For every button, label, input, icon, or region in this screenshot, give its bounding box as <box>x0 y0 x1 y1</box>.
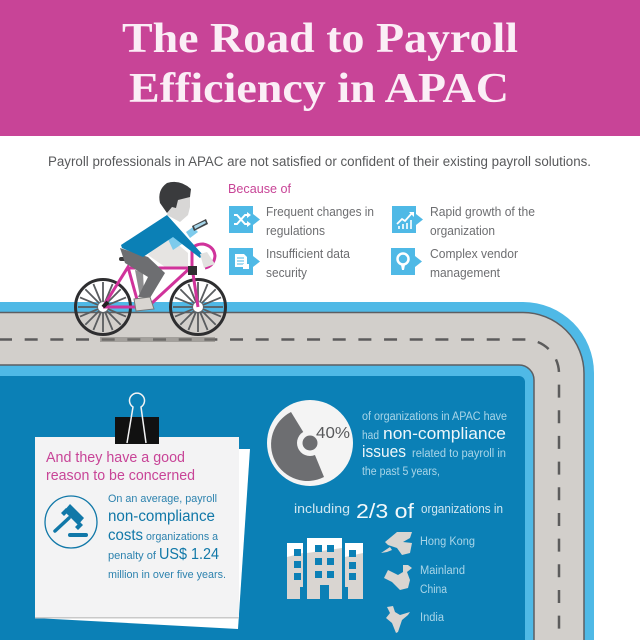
icon: office buildings <box>287 538 363 599</box>
map: China: Mainland <box>420 565 465 577</box>
map: India <box>386 606 445 633</box>
note: paper: reason to be concerned <box>46 467 195 484</box>
statistic text: of organizations in APAC have <box>362 411 507 423</box>
pie chart: 40% <box>267 400 353 486</box>
shoe <box>134 297 154 311</box>
map: Hong Kong <box>381 532 475 555</box>
statistic text: the past 5 years, <box>362 466 440 478</box>
reason: complex vendor management <box>391 247 518 280</box>
note text: penalty of <box>108 550 157 562</box>
including 2/3 of organizations: 2/3 of <box>356 501 415 523</box>
cuff on raised arm <box>186 227 198 238</box>
map: Hong Kong: Hong Kong <box>420 536 475 548</box>
near leg <box>120 248 165 298</box>
note: paper <box>35 393 250 629</box>
note text <box>108 493 226 581</box>
front wheel <box>170 280 226 334</box>
including 2/3 of organizations <box>294 501 503 523</box>
bike frame <box>103 244 215 307</box>
far leg <box>135 270 144 297</box>
reason: rapid growth: organization <box>430 224 495 238</box>
reason: insufficient data security: security <box>266 266 308 280</box>
reason: insufficient data security <box>229 247 350 280</box>
map: China: China <box>420 584 448 596</box>
note text: organizations a <box>146 531 219 543</box>
statistic text: non-compliance <box>383 424 506 443</box>
note heading: And they have a good <box>46 449 185 466</box>
statistic text: issues <box>362 442 406 461</box>
front sheet <box>35 437 239 618</box>
note text: non-compliance <box>108 508 215 525</box>
binder clip <box>115 393 159 444</box>
heading: because of: Because of <box>228 181 291 196</box>
title banner <box>0 0 640 136</box>
phone <box>192 219 208 231</box>
face <box>167 194 190 222</box>
reason: frequent changes <box>229 205 374 238</box>
including 2/3 of organizations: including <box>294 501 350 516</box>
statistic text <box>362 411 507 478</box>
reason: frequent changes: regulations <box>266 224 325 238</box>
map: China <box>384 565 465 596</box>
reason: insufficient data security: Insufficient data <box>266 247 350 261</box>
shirt <box>167 232 188 250</box>
note text: On an average, payroll <box>108 493 217 505</box>
statistic text: had <box>362 430 379 442</box>
including 2/3 of organizations: organizations in <box>421 502 503 516</box>
hair <box>159 182 191 213</box>
pie chart: 40%: 40% <box>316 425 350 442</box>
map: India: India <box>420 612 445 624</box>
back sheet <box>35 449 250 629</box>
hand <box>200 252 215 268</box>
reason: complex vendor management: management <box>430 266 500 280</box>
cyclist illustration <box>76 182 226 340</box>
note text: million in over five years. <box>108 569 226 581</box>
icon: gavel <box>45 496 97 548</box>
reason: complex vendor management: Complex vendor <box>430 247 518 261</box>
torso backdrop <box>148 235 188 267</box>
title banner: Efficiency in APAC <box>129 66 509 112</box>
statistic text: related to payroll in <box>412 448 506 460</box>
note text: costs <box>108 527 143 544</box>
reason: frequent changes: Frequent changes in <box>266 205 374 219</box>
note text: US$ 1.24 <box>159 546 219 563</box>
title banner: The Road to Payroll <box>122 16 518 62</box>
jacket <box>121 215 203 258</box>
intro sentence: Payroll professionals in APAC are not satisfied or confident of their existing payroll solutions. <box>48 154 591 169</box>
reason: rapid growth: Rapid growth of the <box>430 205 535 219</box>
reason: rapid growth <box>392 205 535 238</box>
road <box>0 302 594 640</box>
rear wheel <box>76 280 130 334</box>
